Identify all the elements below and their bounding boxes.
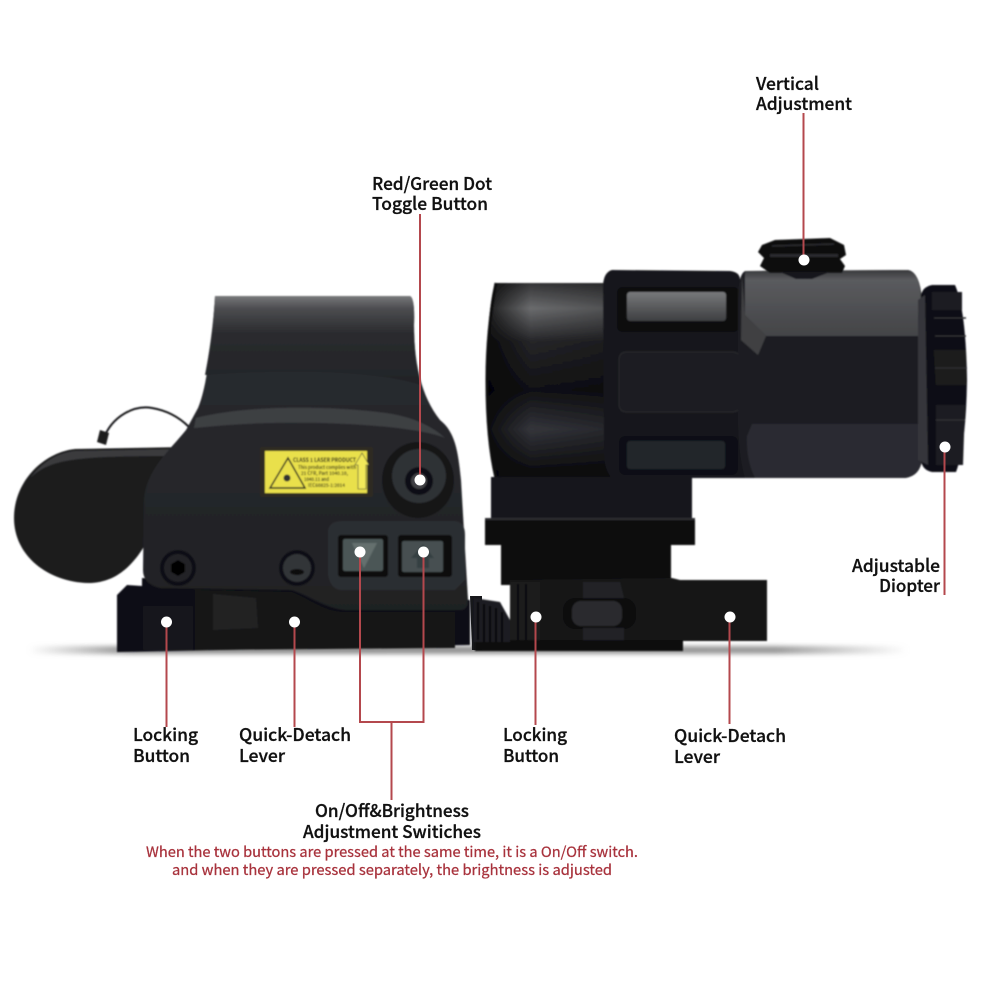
base foot xyxy=(475,640,683,651)
leader: left quick-detach lever xyxy=(289,616,300,727)
toggle button xyxy=(382,442,454,518)
label: red green dot toggle button: Red/Green Dot xyxy=(372,171,492,196)
label: right locking button: Locking xyxy=(503,722,567,747)
magnifier xyxy=(474,238,967,651)
label: right locking button: Button xyxy=(503,743,559,768)
leader: right quick-detach lever xyxy=(724,612,736,724)
label: on/off brightness switches: Adjustment Switiches xyxy=(303,819,481,844)
riser neck xyxy=(501,545,671,585)
lower lever edge xyxy=(195,590,455,650)
label: adjustable diopter xyxy=(852,553,941,598)
label: left quick-detach lever xyxy=(239,722,351,768)
center collar xyxy=(603,270,745,478)
rear body xyxy=(738,270,924,478)
base mount xyxy=(117,578,470,652)
leader: on/off brightness bracket xyxy=(354,546,429,800)
front tube xyxy=(487,283,612,478)
label: right locking button xyxy=(503,722,567,768)
laser warning label: 21 CFR, Part 1040.10, xyxy=(301,470,349,477)
leader: vertical adjustment xyxy=(798,113,810,266)
leader: right locking button xyxy=(530,612,542,725)
flip lens cap xyxy=(14,447,185,583)
laser warning label: This product complies with xyxy=(298,464,356,471)
diopter ring xyxy=(918,285,967,472)
label: right quick-detach lever xyxy=(674,723,786,769)
label: vertical adjustment xyxy=(755,71,852,116)
red dot sight xyxy=(14,296,470,652)
label: vertical adjustment: Adjustment xyxy=(756,91,852,116)
label: on/off brightness switches xyxy=(303,798,481,844)
laser warning label xyxy=(260,447,373,497)
ground shadow xyxy=(28,646,908,654)
vertical adjustment turret xyxy=(758,238,846,279)
lens cap tether xyxy=(103,407,189,440)
red usage note: and when they are pressed separately, the brightness is adjusted xyxy=(172,859,612,880)
switch buttons xyxy=(343,539,383,571)
main housing xyxy=(143,296,468,610)
label: left locking button: Locking xyxy=(133,722,198,747)
leader: left locking button xyxy=(161,616,172,727)
riser mount upper xyxy=(491,477,692,519)
middle pad xyxy=(619,352,740,412)
label: left quick-detach lever: Lever xyxy=(239,743,286,768)
hood top xyxy=(205,296,420,385)
label: vertical adjustment: Vertical xyxy=(755,71,819,96)
laser warning label: 1040.11 and xyxy=(304,476,329,483)
label: red green dot toggle button: Toggle Button xyxy=(372,191,488,216)
red dot mount connector xyxy=(470,596,482,650)
laser warning label: IEC60825-1:2014 xyxy=(308,482,345,489)
laser warning label: CLASS 1 LASER PRODUCT xyxy=(293,456,357,464)
label: on/off brightness switches: On/Off&Brightness xyxy=(315,798,469,823)
quick-detach lever xyxy=(510,578,767,650)
label: adjustable diopter: Adjustable xyxy=(852,553,940,578)
leader: red green toggle xyxy=(414,214,426,486)
red usage note xyxy=(146,841,638,880)
label: adjustable diopter: Diopter xyxy=(879,573,941,598)
label: red green dot toggle button xyxy=(372,171,492,216)
leader: adjustable diopter xyxy=(940,442,950,595)
brightness switch housing xyxy=(328,521,465,590)
label: left locking button: Button xyxy=(133,743,190,768)
upper pad xyxy=(617,287,739,332)
lower pad xyxy=(619,436,738,475)
label: right quick-detach lever: Lever xyxy=(674,744,721,769)
riser mount lower xyxy=(485,518,695,545)
hood lip highlight xyxy=(194,408,445,438)
label: left locking button xyxy=(133,722,198,768)
label: left quick-detach lever: Quick-Detach xyxy=(239,722,351,747)
locking lever grip xyxy=(563,598,636,629)
label: right quick-detach lever: Quick-Detach xyxy=(674,723,786,748)
red usage note: When the two buttons are pressed at the same time, it is a On/Off switch. xyxy=(146,841,638,862)
screws xyxy=(160,550,315,586)
